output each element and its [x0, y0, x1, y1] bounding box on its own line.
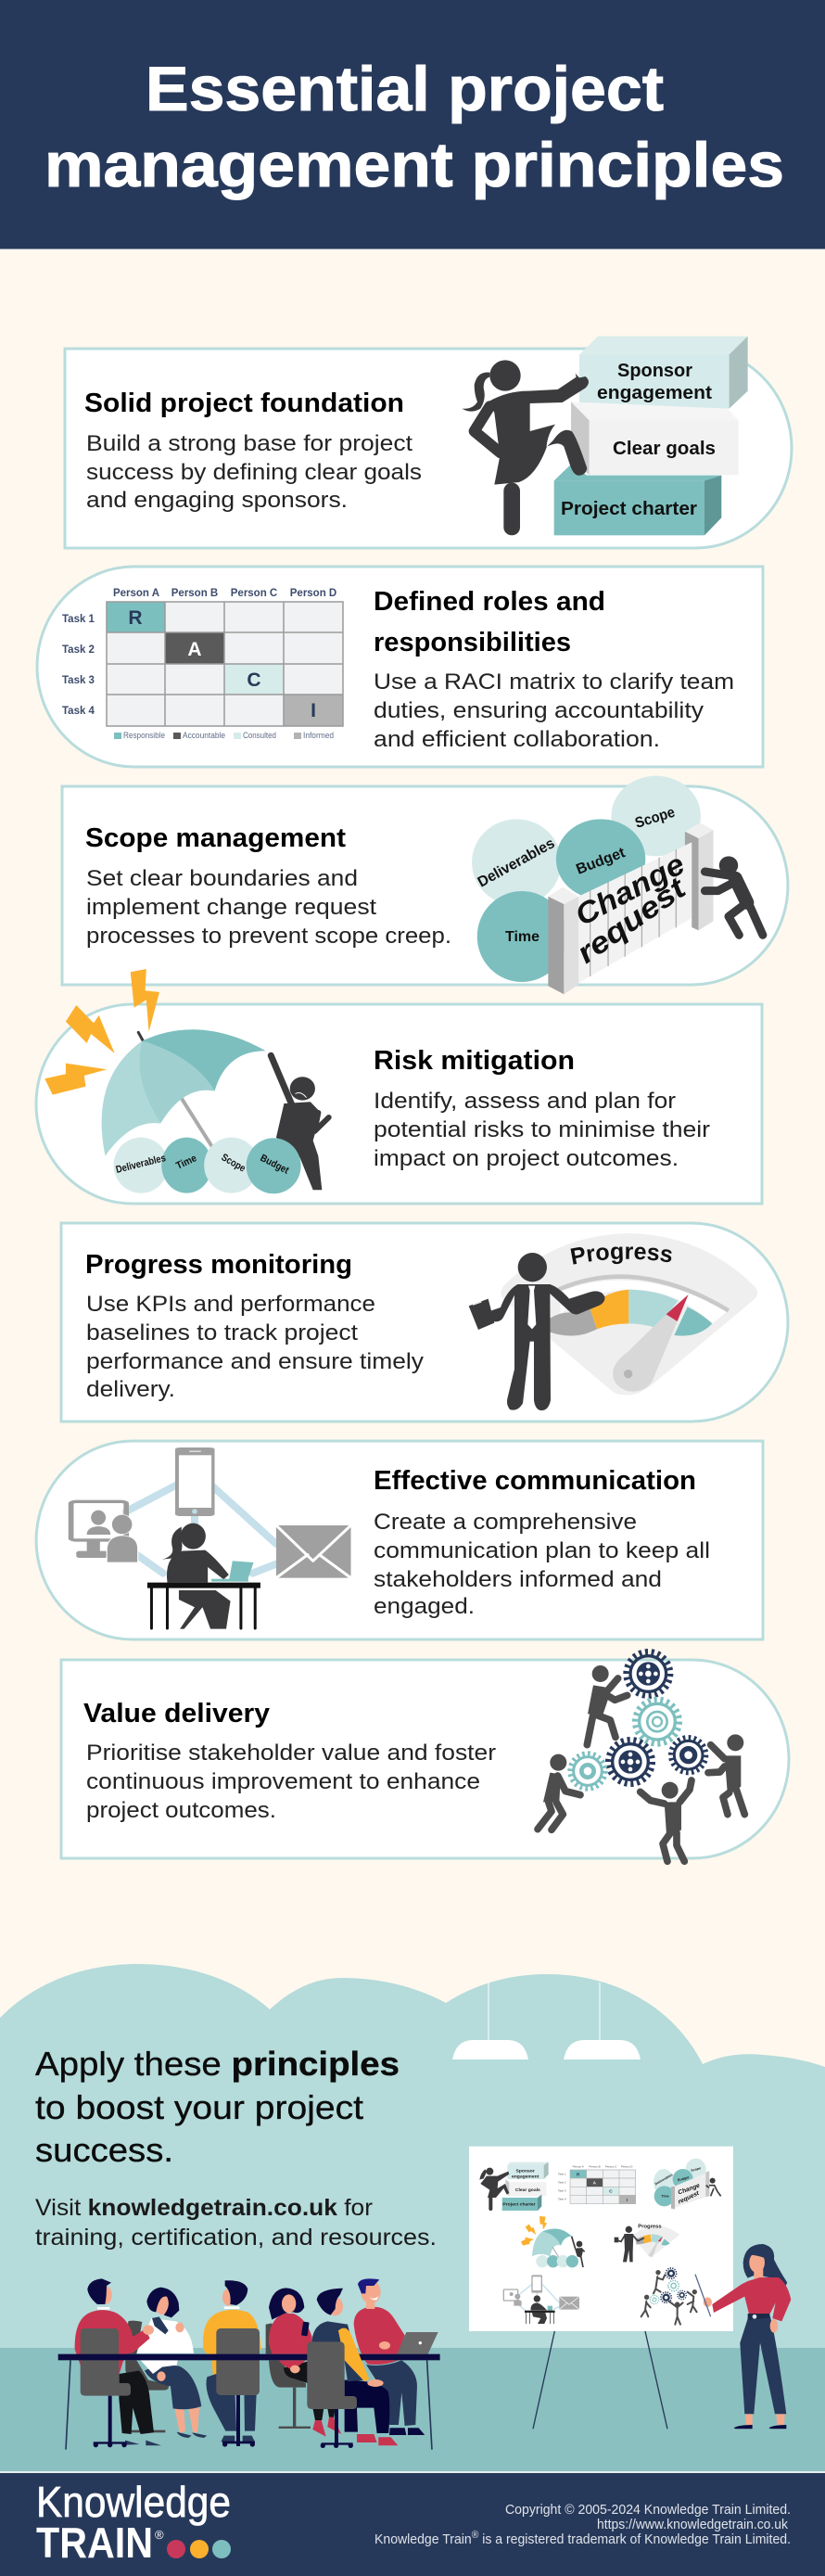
copyright text: is a registered trademark of Knowledge Train Limited. — [478, 2531, 791, 2547]
panel: effective communication — [36, 1441, 763, 1639]
mini icon: change request fence: Change — [678, 2183, 701, 2197]
mini icon: RACI matrix: Person D — [621, 2165, 633, 2169]
body text — [374, 670, 734, 752]
RACI matrix chart: Task 2 — [62, 644, 95, 656]
body text — [86, 866, 451, 949]
copyright text: Copyright © 2005-2024 Knowledge Train Limited. — [505, 2502, 791, 2518]
icon: change request fence holding back bubbles: Deliverables — [476, 835, 557, 890]
body text: and engaging sponsors. — [86, 488, 348, 513]
heading: Scope management — [85, 823, 346, 853]
mini icon: RACI matrix: Person C — [605, 2165, 617, 2169]
logo — [36, 2478, 231, 2567]
title: Essential project — [146, 54, 664, 124]
copyright text: ® — [472, 2530, 478, 2541]
heading: Value delivery — [83, 1699, 270, 1728]
RACI matrix chart — [62, 588, 343, 740]
icon: stacked blocks and climbing woman — [462, 337, 748, 535]
body text: implement change request — [86, 895, 376, 920]
body text: communication plan to keep all — [374, 1538, 710, 1563]
RACI matrix chart: Task 1 — [62, 614, 95, 625]
icon: change request fence holding back bubbles: Change — [569, 847, 690, 932]
body text: potential risks to minimise their — [374, 1117, 710, 1142]
card outline — [36, 1004, 762, 1204]
mini icon: RACI matrix: Person B — [589, 2165, 601, 2169]
body text: performance and ensure timely — [86, 1349, 424, 1374]
mini icon: progress gauge: Progress — [638, 2225, 662, 2230]
card outline — [61, 1223, 788, 1422]
body text: baselines to track project — [86, 1320, 358, 1345]
icon: stacked blocks and climbing woman: Clear goals — [613, 439, 716, 459]
card outline — [65, 349, 792, 548]
mini icon: RACI matrix: Task 3 — [558, 2189, 566, 2193]
body text: Prioritise stakeholder value and foster — [86, 1741, 496, 1766]
person: man with yellow sleeve, seen from behind — [307, 2289, 398, 2448]
call to action text: Visit knowledgetrain.co.uk for — [35, 2195, 373, 2221]
icon: change request fence holding back bubbles: Budget — [574, 845, 628, 878]
body text: delivery. — [86, 1377, 175, 1402]
body text: impact on project outcomes. — [374, 1146, 679, 1171]
mini icon: umbrella — [521, 2216, 585, 2267]
copyright text — [374, 2502, 791, 2547]
body text: engaged. — [374, 1594, 475, 1619]
mini icon: change request fence: request — [678, 2190, 701, 2205]
card outline — [62, 786, 788, 985]
mini icon: project foundation: Sponsor — [516, 2168, 535, 2174]
card outline — [37, 567, 763, 767]
heading: Progress monitoring — [85, 1250, 352, 1280]
body text: Create a comprehensive — [374, 1510, 637, 1535]
RACI matrix chart: Task 3 — [62, 675, 95, 686]
mini icon: RACI matrix: C — [609, 2189, 613, 2194]
panel: defined roles and responsibilities — [37, 567, 763, 767]
call to action section background — [0, 1964, 825, 2473]
logo: TRAIN — [36, 2519, 153, 2567]
heading: Solid project foundation — [84, 389, 404, 418]
heading: Risk mitigation — [374, 1046, 575, 1076]
RACI matrix chart: Person C — [231, 588, 277, 599]
icon: umbrella shielding project constraints from lightning: Scope — [219, 1152, 248, 1175]
mini icon: project foundation: Clear goals — [515, 2187, 540, 2193]
call to action heading: Apply these principles — [35, 2045, 400, 2083]
icon: umbrella shielding project constraints from lightning: Deliverables — [115, 1153, 167, 1176]
body text: processes to prevent scope creep. — [86, 924, 451, 949]
body text — [86, 1741, 496, 1823]
panel: scope management — [62, 776, 788, 994]
icon: change request fence holding back bubbles: Scope — [633, 805, 677, 832]
mini icon: RACI matrix: Person A — [573, 2165, 584, 2169]
RACI matrix chart: Task 4 — [62, 706, 95, 717]
whiteboard — [469, 2147, 733, 2331]
title: management principles — [44, 130, 784, 200]
RACI matrix chart: Person B — [171, 588, 218, 599]
title — [44, 54, 784, 200]
body text: project outcomes. — [86, 1798, 276, 1823]
heading: Defined roles and — [374, 587, 605, 617]
body text: Build a strong base for project — [86, 431, 412, 456]
mini icon: RACI matrix: I — [627, 2198, 628, 2202]
mini icon: communication — [503, 2275, 579, 2324]
card outline — [36, 1441, 763, 1639]
RACI matrix chart: Person D — [290, 588, 336, 599]
legend: Informed — [303, 731, 334, 740]
body text — [374, 1510, 710, 1619]
body text: continuous improvement to enhance — [86, 1769, 480, 1794]
person: woman with phone — [266, 2288, 341, 2437]
call to action text: training, certification, and resources. — [35, 2225, 437, 2251]
copyright text: https://www.knowledgetrain.co.uk — [597, 2517, 788, 2532]
logo: ® — [155, 2528, 164, 2542]
person: man in red, seen from behind — [75, 2278, 161, 2447]
RACI matrix chart: Person A — [113, 588, 159, 599]
RACI matrix chart: C — [247, 670, 261, 691]
body text: success by defining clear goals — [86, 460, 422, 485]
icon: change request fence holding back bubbles: request — [570, 870, 692, 970]
illustration: team seated at meeting table — [58, 2278, 440, 2450]
icon: umbrella shielding project constraints from lightning: Budget — [259, 1153, 291, 1177]
icon: stacked blocks and climbing woman: Project charter — [561, 499, 697, 519]
illustration: presentation board and presenter — [469, 2147, 791, 2429]
legend — [114, 731, 334, 740]
legend: Accountable — [183, 731, 225, 740]
body text — [86, 431, 422, 513]
heading — [374, 587, 605, 657]
panel: value delivery — [61, 1652, 789, 1861]
icon: umbrella shielding project constraints from lightning — [44, 969, 329, 1193]
mini icon: RACI matrix: A — [593, 2181, 597, 2186]
gauge label: Progress — [571, 1246, 672, 1265]
body text: and efficient collaboration. — [374, 727, 660, 752]
logo: Knowledge — [36, 2478, 231, 2526]
icon: change request fence holding back bubbles: Time — [505, 929, 539, 945]
icon: man presenting progress gauge — [469, 1233, 757, 1410]
call to action text — [35, 2195, 437, 2251]
mini icon: project foundation: engagement — [512, 2174, 539, 2180]
body text — [86, 1292, 424, 1402]
body text: duties, ensuring accountability — [374, 698, 704, 723]
mini icon: gears and team — [641, 2268, 697, 2325]
person: man in yellow, seen from behind — [203, 2280, 261, 2447]
icon: team assembling gears — [538, 1652, 744, 1861]
panel: solid project foundation — [65, 337, 792, 548]
card outline — [61, 1660, 789, 1858]
footer — [0, 2473, 825, 2576]
body text — [374, 1089, 710, 1171]
RACI matrix chart: R — [128, 607, 143, 629]
legend: Consulted — [243, 731, 276, 740]
heading: responsibilities — [374, 628, 571, 657]
panel: risk mitigation — [36, 969, 762, 1204]
presenter — [695, 2244, 791, 2429]
mini icon: change request fence: Budget — [678, 2175, 690, 2182]
icon: stacked blocks and climbing woman: Sponsor — [617, 361, 692, 381]
panel: progress monitoring — [59, 1222, 790, 1422]
icon: stacked blocks and climbing woman: engagement — [597, 383, 712, 403]
mini icon: change request fence: Deliverables — [654, 2173, 673, 2187]
person: man in red with laptop — [354, 2278, 438, 2435]
body text: Set clear boundaries and — [86, 866, 358, 891]
pointer — [695, 2275, 711, 2316]
icon: woman at desk connected to phone, video call and email — [71, 1447, 351, 1629]
easel legs — [533, 2331, 667, 2429]
mini icon: change request fence: Scope — [691, 2166, 702, 2173]
heading: Effective communication — [374, 1466, 696, 1496]
person: woman in white shirt — [125, 2288, 207, 2438]
mini icon: change request fence — [654, 2159, 721, 2210]
body text: Use KPIs and performance — [86, 1292, 375, 1317]
mini icon: RACI matrix: Task 2 — [558, 2181, 566, 2185]
call to action heading: success. — [35, 2131, 173, 2169]
mini icon: RACI matrix: Task 1 — [558, 2173, 566, 2176]
mini icon: RACI matrix: Task 4 — [558, 2198, 566, 2201]
mini icon: RACI matrix — [558, 2165, 636, 2204]
body text: stakeholders informed and — [374, 1567, 662, 1592]
mini icon: project foundation: Project charter — [502, 2202, 536, 2208]
mini icon: change request fence: Time — [661, 2195, 669, 2199]
call to action heading — [35, 2045, 400, 2169]
copyright text: Knowledge Train — [374, 2531, 478, 2547]
mini icon: progress gauge — [615, 2225, 679, 2262]
icon: umbrella shielding project constraints from lightning: Time — [174, 1153, 198, 1172]
body text: Use a RACI matrix to clarify team — [374, 670, 734, 695]
RACI matrix chart: I — [311, 700, 316, 721]
body text: Identify, assess and plan for — [374, 1089, 676, 1114]
mini icon: project foundation — [479, 2162, 549, 2211]
call to action heading: to boost your project — [35, 2088, 363, 2126]
icon: ceiling lamps — [452, 1983, 641, 2060]
legend: Responsible — [123, 731, 165, 740]
RACI matrix chart: A — [187, 639, 202, 660]
table — [58, 2354, 440, 2450]
icon: change request fence holding back bubbles — [472, 776, 763, 994]
mini icon: RACI matrix: R — [577, 2172, 580, 2176]
header banner — [0, 0, 825, 249]
